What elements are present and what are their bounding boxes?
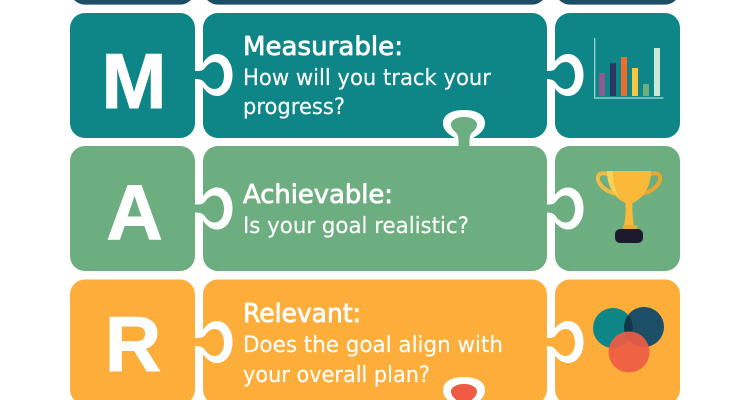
icon tile: trophy: [555, 146, 680, 271]
letter tile M: M: [102, 37, 166, 125]
row: previous step (cropped): [70, 0, 680, 5]
icon tile: bar chart: [555, 13, 680, 138]
puzzle tab: text to icon: [546, 188, 584, 230]
text tile: Relevant: [203, 280, 547, 400]
text tile: Measurable: [203, 13, 547, 138]
text tile: Achievable: Achievable:: [243, 180, 393, 210]
puzzle tab: Achievable into Measurable: [443, 110, 485, 146]
text tile: Measurable: How will you track your: [243, 66, 492, 91]
text tile: Achievable: [203, 146, 547, 271]
icon tile: overlapping circles: [555, 280, 680, 400]
text tile: Relevant: Does the goal align with: [243, 333, 503, 358]
row: Measurable: [70, 13, 680, 138]
text tile: Relevant: Relevant:: [243, 299, 361, 329]
puzzle tab: text to icon: [546, 54, 584, 96]
text tile: Measurable: Measurable:: [243, 32, 403, 62]
puzzle tab: text to icon: [546, 321, 584, 363]
letter tile R: [70, 280, 195, 400]
text tile: Relevant: your overall plan?: [243, 363, 430, 388]
letter tile A: [70, 146, 195, 271]
text tile: Achievable: Is your goal realistic?: [243, 214, 469, 239]
letter tile M: [70, 13, 195, 138]
letter tile R: R: [105, 300, 161, 388]
puzzle tab: next step into Relevant: [443, 377, 485, 400]
letter tile A: A: [106, 168, 163, 256]
puzzle tab: letter to text: [195, 54, 232, 96]
puzzle tab: letter to text: [195, 188, 232, 230]
text tile: Measurable: progress?: [243, 95, 345, 120]
row: Achievable: [70, 110, 680, 271]
row: Relevant: [70, 280, 680, 400]
puzzle tab: letter to text: [195, 321, 232, 363]
